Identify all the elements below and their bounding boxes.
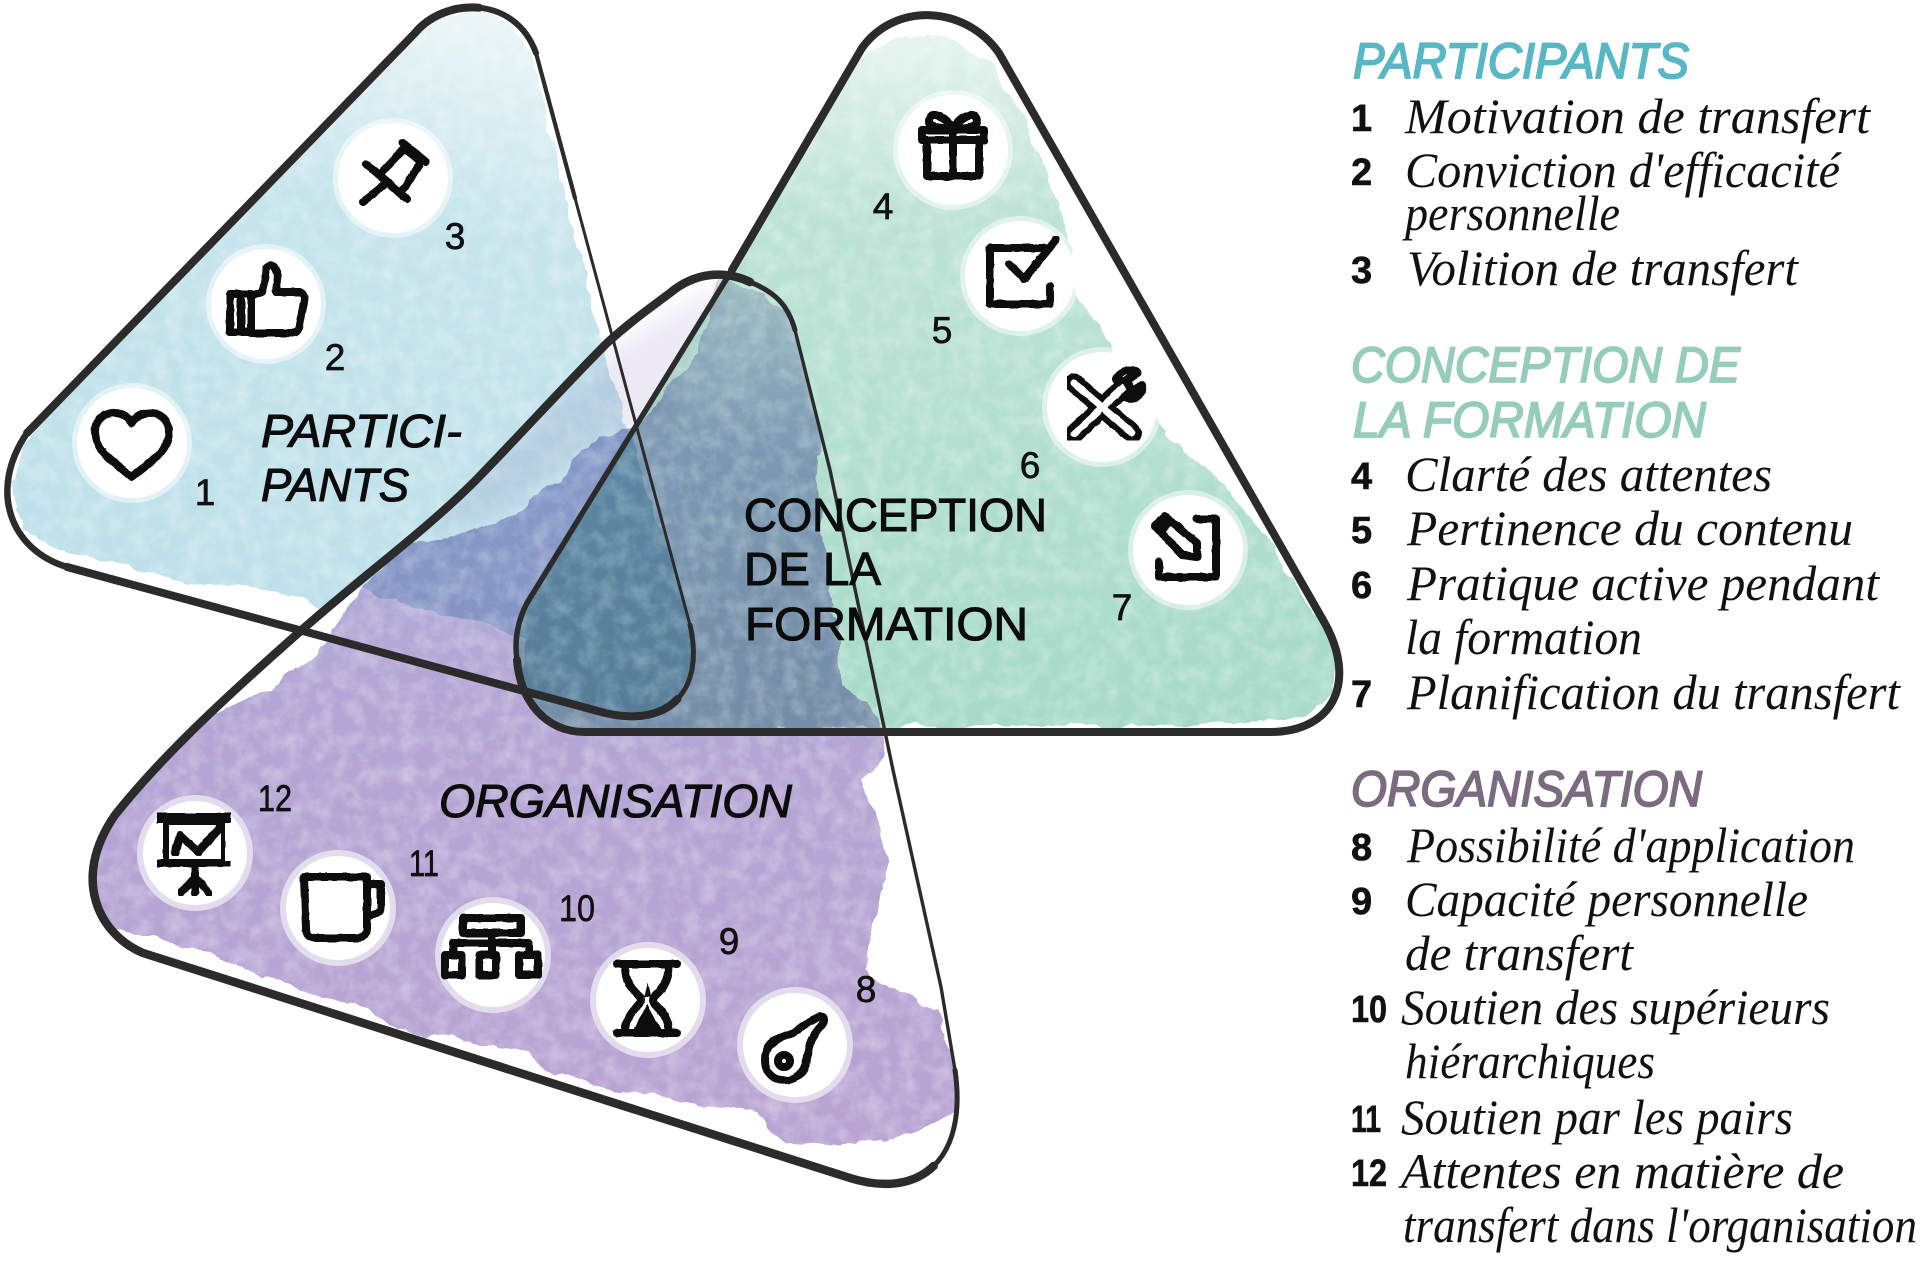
triangle outline: participants xyxy=(7,7,693,716)
legend item 3: Volition de transfert xyxy=(1407,240,1799,296)
watercolor wash: conception xyxy=(510,34,1340,732)
icon: tools xyxy=(1047,352,1157,462)
legend item 9: de transfert xyxy=(1405,925,1634,981)
legend item 4: Clarté des attentes xyxy=(1405,446,1772,502)
icon: thumbs up xyxy=(211,249,321,359)
legend item 6: Pratique active pendant xyxy=(1406,555,1880,611)
legend item 12 xyxy=(1351,1143,1917,1253)
label: participants: PARTICI- xyxy=(261,405,462,457)
watercolor wash: organisation pale top xyxy=(438,294,712,526)
triangle outline: conception xyxy=(516,15,1339,732)
legend heading: participants: PARTICIPANTS xyxy=(1353,33,1689,89)
legend item 12: Attentes en matière de xyxy=(1398,1143,1844,1199)
icon: cup xyxy=(283,853,393,963)
legend heading: organisation: ORGANISATION xyxy=(1351,761,1703,817)
diagram numbers: 8 xyxy=(856,969,876,1010)
diagram numbers: 4 xyxy=(873,186,893,227)
legend item 5: Pertinence du contenu xyxy=(1406,500,1853,556)
diagram numbers: 6 xyxy=(1020,445,1040,486)
legend item 5: 5 xyxy=(1351,510,1372,552)
legend item 8: 8 xyxy=(1351,827,1372,869)
legend item 2 xyxy=(1351,142,1842,241)
legend item 10: hiérarchiques xyxy=(1405,1033,1655,1089)
legend item 12: 12 xyxy=(1351,1153,1387,1195)
diagram numbers: 7 xyxy=(1112,587,1132,628)
watercolor wash: participants xyxy=(10,10,700,718)
watercolor wash: organisation xyxy=(78,278,965,1145)
legend item 6: la formation xyxy=(1405,609,1642,665)
label: organisation: ORGANISATION xyxy=(439,775,793,827)
diagram numbers: 2 xyxy=(325,337,345,378)
icon: fruit shape xyxy=(740,990,850,1100)
legend item 6: 6 xyxy=(1351,565,1372,607)
icon: gift xyxy=(898,95,1008,205)
label: conception de la formation: CONCEPTION xyxy=(744,489,1047,541)
label: conception de la formation: DE LA xyxy=(744,543,881,595)
diagram numbers: 12 xyxy=(258,778,292,819)
icon: checkbox xyxy=(965,221,1075,331)
icon: push pin xyxy=(338,123,448,233)
icon: presentation board xyxy=(140,798,250,908)
legend item 10 xyxy=(1351,979,1830,1089)
legend item 9 xyxy=(1351,871,1808,981)
legend heading: conception de la formation: LA FORMATION xyxy=(1353,392,1707,448)
diagram numbers xyxy=(195,186,1132,1010)
legend item 11: Soutien par les pairs xyxy=(1401,1089,1793,1145)
label: participants: PANTS xyxy=(261,459,409,511)
legend item 7: 7 xyxy=(1351,674,1372,716)
icon: pencil and box xyxy=(1133,495,1243,605)
diagram numbers: 5 xyxy=(932,310,952,351)
icon: heart xyxy=(77,388,187,498)
legend item 1: 1 xyxy=(1351,98,1372,140)
legend item 8: Possibilité d'application xyxy=(1406,817,1855,873)
legend item 9: 9 xyxy=(1351,881,1372,923)
triangle outline: organisation xyxy=(93,275,957,1184)
diagram numbers: 9 xyxy=(719,921,739,962)
legend heading: conception de la formation xyxy=(1351,337,1741,448)
diagram numbers: 3 xyxy=(445,216,465,257)
label: conception de la formation: FORMATION xyxy=(745,598,1028,650)
legend heading: conception de la formation: CONCEPTION DE xyxy=(1351,337,1741,393)
legend item 7: Planification du transfert xyxy=(1406,664,1901,720)
legend item 6 xyxy=(1351,555,1880,665)
diagram numbers: 11 xyxy=(409,843,439,884)
legend item 3: 3 xyxy=(1351,250,1372,292)
legend item 2: Conviction d'efficacité xyxy=(1405,142,1842,198)
diagram numbers: 1 xyxy=(195,472,215,513)
icon: organisation chart xyxy=(438,900,548,1010)
legend item 2: 2 xyxy=(1351,152,1372,194)
diagram numbers: 10 xyxy=(559,888,595,929)
legend item 10: 10 xyxy=(1351,989,1387,1031)
label: conception de la formation xyxy=(744,489,1047,650)
legend item 1: Motivation de transfert xyxy=(1404,88,1871,144)
legend item 9: Capacité personnelle xyxy=(1405,871,1808,927)
icon: hourglass xyxy=(593,945,703,1055)
label: participants xyxy=(261,405,462,511)
legend item 2: personnelle xyxy=(1402,185,1620,241)
legend item 10: Soutien des supérieurs xyxy=(1401,979,1830,1035)
legend item 11: 11 xyxy=(1351,1099,1381,1141)
legend item 4: 4 xyxy=(1351,456,1372,498)
